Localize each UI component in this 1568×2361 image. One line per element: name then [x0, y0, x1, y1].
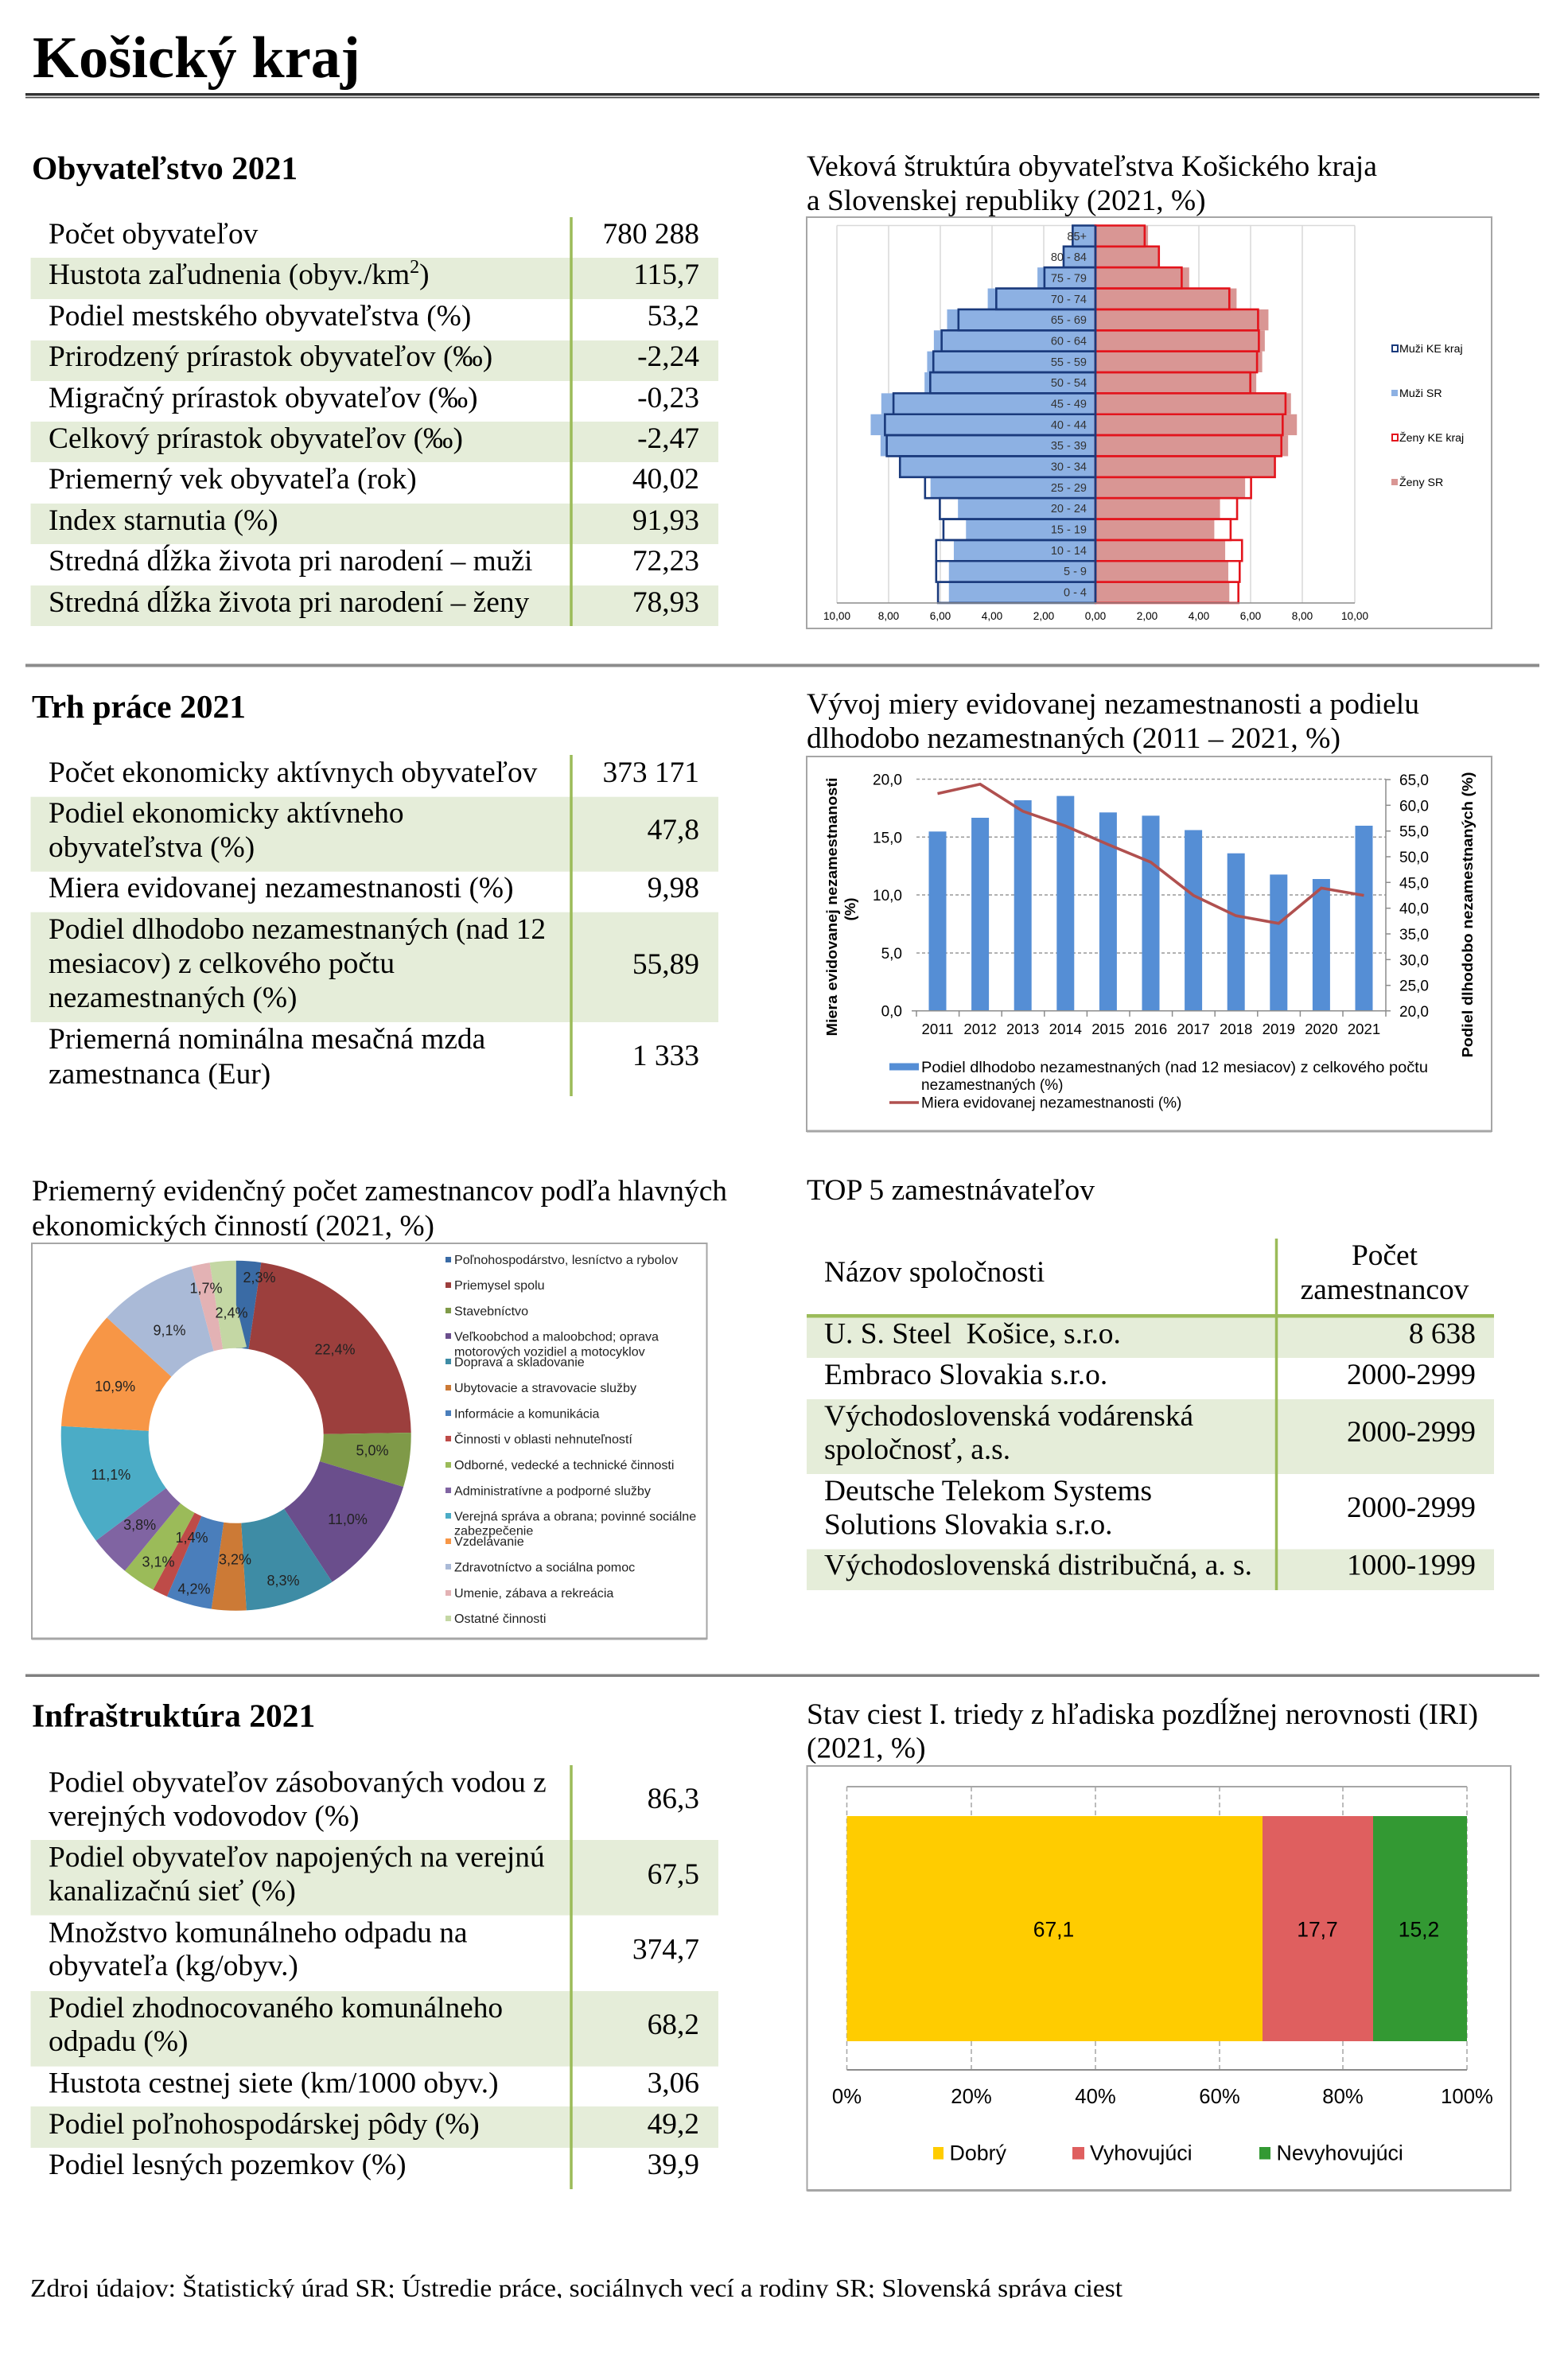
chart: unemployment bars and line: 10,0	[873, 888, 902, 904]
chart: employees by economic activity donut: 3,2%	[219, 1551, 251, 1567]
table: infrastructure: obyvateľa (kg/obyv.)	[49, 1950, 298, 1982]
chart: unemployment bars and line: 2020	[1305, 1021, 1338, 1037]
table: population: 53,2	[648, 300, 699, 333]
table: TOP 5 employers: 2000-2999	[1347, 1416, 1476, 1449]
chart: employees by economic activity donut	[32, 1243, 706, 1639]
chart: population pyramid: 40 - 44	[1051, 419, 1087, 432]
table: population: 91,93	[632, 504, 699, 537]
chart: population pyramid: 6,00	[930, 610, 951, 622]
chart: unemployment bars and line: 0,0	[881, 1004, 902, 1021]
table: population: 115,7	[633, 259, 699, 291]
chart: population pyramid: 5 - 9	[1064, 566, 1087, 578]
chart: unemployment bars and line: 2011	[922, 1021, 953, 1037]
table: population: 40,02	[632, 463, 699, 496]
legend: unemployment chart: nezamestnaných (%)	[921, 1077, 1063, 1094]
table: population: Podiel mestského obyvateľstva (%)	[49, 300, 471, 333]
chart: unemployment bars and line: 2014	[1049, 1021, 1082, 1037]
table: labour market: Miera evidovanej nezamestnanosti (%)	[49, 872, 514, 904]
table: population: 780 288	[602, 218, 699, 251]
chart: road condition stacked bar: 80%	[1322, 2086, 1364, 2108]
heading: age structure chart: Veková štruktúra obyvateľstva Košického kraja	[807, 150, 1377, 183]
table: population: Stredná dĺžka života pri narodení – ženy	[49, 585, 530, 619]
legend: economic activities: Stavebníctvo	[454, 1305, 528, 1319]
heading: employees donut chart: Priemerný evidenčný počet zamestnancov podľa hlavných	[32, 1175, 727, 1208]
chart: population pyramid: 6,00	[1240, 610, 1262, 622]
chart: employees by economic activity donut: 1,4%	[175, 1530, 208, 1546]
chart: population pyramid: 35 - 39	[1051, 440, 1087, 453]
chart: unemployment bars and line: Podiel dlhodobo nezamestnaných (%)	[1459, 772, 1476, 1058]
chart: unemployment bars and line	[807, 757, 1492, 1131]
table: population: Celkový prírastok obyvateľov (‰)	[49, 422, 463, 455]
title double rule	[25, 93, 1539, 98]
legend: economic activities	[445, 1253, 696, 1626]
table: population: -0,23	[637, 382, 699, 414]
heading: Trh práce 2021: Trh práce 2021	[32, 688, 246, 725]
chart: population pyramid	[807, 217, 1492, 628]
chart: population pyramid: 25 - 29	[1051, 482, 1087, 495]
heading: unemployment chart: dlhodobo nezamestnaných (2011 – 2021, %)	[807, 722, 1340, 755]
table: infrastructure: verejných vodovodov (%)	[49, 1800, 359, 1833]
legend: economic activities: Odborné, vedecké a technické činnosti	[454, 1458, 674, 1472]
table: labour market: nezamestnaných (%)	[49, 982, 297, 1014]
chart: road condition stacked bar: 0%	[832, 2086, 862, 2108]
chart: population pyramid: 10,00	[823, 610, 850, 622]
chart: population pyramid: 30 - 34	[1051, 461, 1087, 474]
chart: employees by economic activity donut: 2,4%	[215, 1305, 248, 1321]
legend: pyramid: Muži SR	[1399, 387, 1442, 400]
table: infrastructure: 374,7	[632, 1933, 699, 1966]
chart: population pyramid: 75 - 79	[1051, 272, 1087, 285]
table: population: 78,93	[632, 586, 699, 619]
legend: road condition	[933, 2141, 1403, 2165]
table: TOP 5 employers: Počet	[1352, 1239, 1418, 1272]
legend: unemployment chart: Miera evidovanej nezamestnanosti (%)	[921, 1095, 1181, 1112]
chart: population pyramid: 85+	[1067, 231, 1087, 243]
chart: employees by economic activity donut: 5,0%	[356, 1443, 389, 1459]
chart: unemployment bars and line: 15,0	[873, 830, 902, 846]
section divider 2	[25, 1674, 1539, 1677]
legend: economic activities: Vzdelávanie	[454, 1534, 524, 1549]
table: infrastructure: Množstvo komunálneho odpadu na	[49, 1917, 468, 1949]
legend: unemployment chart	[889, 1060, 1428, 1112]
table: TOP 5 employers: Solutions Slovakia s.r.o.	[824, 1508, 1113, 1542]
chart: unemployment bars and line: Miera evidovanej nezamestnanosti	[823, 778, 840, 1036]
chart: unemployment bars and line: (%)	[842, 898, 858, 920]
chart: unemployment bars and line: 60,0	[1399, 798, 1429, 815]
table: TOP 5 employers: Východoslovenská distribučná, a. s.	[824, 1550, 1252, 1581]
table: TOP 5 employers: 1000-1999	[1347, 1550, 1476, 1581]
table: infrastructure: 39,9	[648, 2149, 699, 2181]
chart: road condition stacked bar: 40%	[1075, 2086, 1116, 2108]
chart: unemployment bars and line: 5,0	[881, 946, 902, 963]
table: infrastructure	[30, 1765, 718, 2189]
table: TOP 5 employers: 2000-2999	[1347, 1492, 1476, 1524]
table: infrastructure: odpadu (%)	[49, 2025, 188, 2058]
chart: population pyramid: 8,00	[878, 610, 900, 622]
chart: population pyramid: 20 - 24	[1051, 503, 1087, 515]
chart: employees by economic activity donut: 8,3%	[267, 1573, 300, 1589]
chart: employees by economic activity donut: 11,1%	[91, 1467, 130, 1483]
chart: unemployment bars and line: 35,0	[1399, 927, 1429, 943]
chart: population pyramid: 65 - 69	[1051, 314, 1087, 327]
legend: economic activities: Zdravotníctvo a sociálna pomoc	[454, 1561, 635, 1575]
heading: employees donut chart: ekonomických činností (2021, %)	[32, 1210, 434, 1243]
table: population: Prirodzený prírastok obyvateľov (‰)	[49, 340, 492, 373]
table: population: Migračný prírastok obyvateľov (‰)	[49, 382, 478, 414]
chart: population pyramid: 55 - 59	[1051, 356, 1087, 369]
heading: unemployment chart	[807, 688, 1419, 755]
heading: age structure chart: a Slovenskej republiky (2021, %)	[807, 185, 1206, 217]
chart: unemployment bars and line: 2017	[1177, 1021, 1210, 1037]
table: population: 72,23	[632, 545, 699, 578]
legend: pyramid	[1391, 343, 1464, 489]
legend: economic activities: Ubytovacie a stravovacie služby	[454, 1381, 637, 1395]
chart: population pyramid: 8,00	[1292, 610, 1313, 622]
chart: population pyramid: 0 - 4	[1064, 587, 1087, 600]
legend: economic activities: Administratívne a podporné služby	[454, 1484, 652, 1499]
chart: population pyramid: 80 - 84	[1051, 251, 1087, 264]
chart: employees by economic activity donut: 3,8%	[123, 1517, 156, 1533]
legend: economic activities: motorových vozidiel a motocyklov	[454, 1344, 645, 1359]
table: labour market: mesiacov) z celkového počtu	[49, 947, 395, 980]
chart: unemployment bars and line: 2021	[1348, 1021, 1380, 1037]
legend: road condition: Dobrý	[950, 2141, 1007, 2165]
heading: unemployment chart: Vývoj miery evidovanej nezamestnanosti a podielu	[807, 688, 1419, 721]
chart: population pyramid: 2,00	[1137, 610, 1158, 622]
chart: road condition stacked bar	[807, 1766, 1511, 2191]
chart: population pyramid: 60 - 64	[1051, 336, 1087, 348]
chart: employees by economic activity donut: 4,2%	[177, 1581, 211, 1597]
legend: road condition: Nevyhovujúci	[1276, 2141, 1403, 2165]
chart: unemployment bars and line: 2018	[1220, 1021, 1252, 1037]
table: population: Priemerný vek obyvateľa (rok)	[49, 463, 417, 496]
table: labour market: 373 171	[602, 757, 699, 789]
chart: road condition stacked bar: 60%	[1199, 2086, 1240, 2108]
table: labour market: obyvateľstva (%)	[49, 831, 255, 864]
table: labour market: 1 333	[632, 1040, 699, 1072]
heading: road condition chart	[807, 1697, 1478, 1764]
chart: employees by economic activity donut: 11,0%	[328, 1511, 368, 1527]
table: infrastructure: 86,3	[648, 1783, 699, 1815]
section divider 1	[25, 663, 1539, 667]
chart: road condition stacked bar: 20%	[951, 2086, 992, 2108]
table: TOP 5 employers: Názov spoločnosti	[824, 1256, 1045, 1289]
legend: economic activities: Umenie, zábava a rekreácia	[454, 1586, 613, 1601]
table: population: )	[419, 259, 430, 291]
table: infrastructure: 3,06	[648, 2067, 699, 2100]
table: TOP 5 employers: U. S. Steel Košice, s.r.o.	[824, 1317, 1121, 1351]
table: population: -2,24	[637, 340, 699, 373]
chart: unemployment bars and line: 50,0	[1399, 850, 1429, 866]
chart: unemployment bars and line: 2013	[1006, 1021, 1039, 1037]
legend: economic activities: Ostatné činnosti	[454, 1612, 546, 1626]
source note	[0, 2273, 1568, 2361]
table: labour market: Počet ekonomicky aktívnych obyvateľov	[49, 757, 538, 789]
legend: economic activities: zabezpečenie	[454, 1524, 533, 1538]
table: infrastructure: kanalizačnú sieť (%)	[49, 1875, 296, 1908]
chart: population pyramid: 0,00	[1085, 610, 1107, 622]
legend: economic activities: Verejná správa a obrana; povinné sociálne	[454, 1510, 696, 1524]
legend: unemployment chart: Podiel dlhodobo nezamestnaných (nad 12 mesiacov) z celkového počtu	[921, 1060, 1428, 1076]
table: population: Počet obyvateľov	[49, 218, 259, 251]
legend: road condition: Vyhovujúci	[1090, 2141, 1193, 2165]
chart: road condition stacked bar: 67,1	[1033, 1917, 1074, 1941]
table: infrastructure: Podiel obyvateľov zásobovaných vodou z	[49, 1766, 547, 1799]
table: TOP 5 employers: spoločnosť, a.s.	[824, 1433, 1010, 1466]
heading: employees donut chart	[32, 1175, 727, 1243]
heading: TOP 5 employers: TOP 5 zamestnávateľov	[807, 1174, 1095, 1207]
source note: Zdroj údajov: Štatistický úrad SR; Ústredie práce, sociálnych vecí a rodiny SR; Slovenská správa ciest	[30, 2273, 1123, 2302]
table: TOP 5 employers: Embraco Slovakia s.r.o.	[824, 1359, 1107, 1391]
table: labour market: 55,89	[632, 948, 699, 981]
table: labour market: 9,98	[648, 872, 699, 904]
chart: unemployment bars and line: 2019	[1263, 1021, 1295, 1037]
table: labour market: zamestnanca (Eur)	[49, 1058, 270, 1091]
table: TOP 5 employers: 2000-2999	[1347, 1359, 1476, 1391]
title: Košický kraj	[33, 25, 360, 91]
legend: economic activities: Doprava a skladovanie	[454, 1356, 585, 1370]
chart: unemployment bars and line: 40,0	[1399, 901, 1429, 918]
chart: unemployment bars and line: 45,0	[1399, 875, 1429, 892]
chart: population pyramid: 50 - 54	[1051, 377, 1087, 390]
chart: employees by economic activity donut: 2,3%	[243, 1270, 276, 1286]
chart: employees by economic activity donut: 9,1%	[153, 1322, 186, 1338]
chart: population pyramid: 2,00	[1033, 610, 1055, 622]
table: population: -2,47	[637, 422, 699, 455]
table: labour market	[30, 755, 718, 1096]
chart: unemployment bars and line: 2015	[1091, 1021, 1125, 1037]
chart: population pyramid: 15 - 19	[1051, 523, 1087, 536]
table: infrastructure: Podiel lesných pozemkov (%)	[49, 2149, 407, 2181]
table: infrastructure: Podiel zhodnocovaného komunálneho	[49, 1992, 503, 2025]
table: TOP 5 employers: Deutsche Telekom Systems	[824, 1475, 1152, 1507]
chart: employees by economic activity donut: 22,4%	[314, 1341, 356, 1357]
legend: economic activities: Veľkoobchod a maloobchod; oprava	[454, 1330, 659, 1344]
table: infrastructure: Hustota cestnej siete (km/1000 obyv.)	[49, 2067, 499, 2100]
table: population: 2	[410, 257, 419, 278]
chart: employees by economic activity donut: 10,9%	[95, 1379, 135, 1394]
chart: population pyramid: 10 - 14	[1051, 545, 1087, 558]
chart: unemployment bars and line: 20,0	[1399, 1004, 1429, 1021]
chart: unemployment bars and line: 65,0	[1399, 772, 1429, 789]
table: population: Index starnutia (%)	[49, 504, 278, 537]
chart: population pyramid: 4,00	[982, 610, 1003, 622]
table: labour market: Podiel ekonomicky aktívneho	[49, 797, 404, 830]
table: TOP 5 employers: 8 638	[1409, 1317, 1476, 1351]
table: TOP 5 employers	[807, 1239, 1494, 1590]
legend: pyramid: Ženy SR	[1399, 476, 1443, 489]
table: infrastructure: 67,5	[648, 1858, 699, 1891]
chart: road condition stacked bar: 17,7	[1297, 1917, 1338, 1941]
heading: age structure chart	[807, 150, 1377, 217]
chart: unemployment bars and line: 2012	[963, 1021, 997, 1037]
table: labour market: Podiel dlhodobo nezamestnaných (nad 12	[49, 913, 546, 946]
chart: population pyramid: 10,00	[1341, 610, 1368, 622]
legend: pyramid: Ženy KE kraj	[1399, 431, 1464, 445]
table: population	[30, 217, 718, 626]
chart: unemployment bars and line: 30,0	[1399, 952, 1429, 969]
chart: population pyramid: 45 - 49	[1051, 398, 1087, 410]
table: labour market: Priemerná nominálna mesačná mzda	[49, 1023, 486, 1056]
legend: economic activities: Poľnohospodárstvo, lesníctvo a rybolov	[454, 1253, 678, 1267]
chart: unemployment bars and line: 2016	[1134, 1021, 1167, 1037]
heading: road condition chart: Stav ciest I. triedy z hľadiska pozdĺžnej nerovnosti (IRI)	[807, 1697, 1478, 1731]
table: population: Stredná dĺžka života pri narodení – muži	[49, 543, 532, 578]
chart: population pyramid: 4,00	[1189, 610, 1210, 622]
legend: economic activities: Priemysel spolu	[454, 1278, 545, 1293]
table: infrastructure: Podiel obyvateľov napojených na verejnú	[49, 1841, 545, 1874]
chart: employees by economic activity donut: 1,7%	[189, 1281, 223, 1297]
heading: Obyvateľstvo 2021: Obyvateľstvo 2021	[32, 150, 298, 186]
table: labour market: 47,8	[648, 814, 699, 846]
chart: road condition stacked bar: 100%	[1441, 2086, 1493, 2108]
table: TOP 5 employers: Východoslovenská vodárenská	[824, 1400, 1194, 1433]
legend: pyramid: Muži KE kraj	[1399, 343, 1463, 356]
legend: economic activities: Informácie a komunikácia	[454, 1406, 600, 1421]
table: infrastructure: Podiel poľnohospodárskej pôdy (%)	[49, 2108, 480, 2141]
heading: road condition chart: (2021, %)	[807, 1733, 926, 1764]
table: population: Hustota zaľudnenia (obyv./km	[49, 259, 410, 291]
chart: employees by economic activity donut: 3,1%	[142, 1554, 175, 1570]
chart: unemployment bars and line: 25,0	[1399, 978, 1429, 995]
chart: unemployment bars and line: 20,0	[873, 772, 902, 789]
table: infrastructure: 49,2	[648, 2108, 699, 2141]
chart: road condition stacked bar: 15,2	[1399, 1917, 1439, 1941]
heading: Infraštruktúra 2021: Infraštruktúra 2021	[32, 1698, 315, 1734]
legend: economic activities: Činnosti v oblasti nehnuteľností	[454, 1432, 632, 1446]
chart: unemployment bars and line: 55,0	[1399, 824, 1429, 841]
chart: population pyramid: 70 - 74	[1051, 294, 1087, 306]
table: infrastructure: 68,2	[648, 2009, 699, 2041]
table: TOP 5 employers: zamestnancov	[1301, 1274, 1469, 1306]
